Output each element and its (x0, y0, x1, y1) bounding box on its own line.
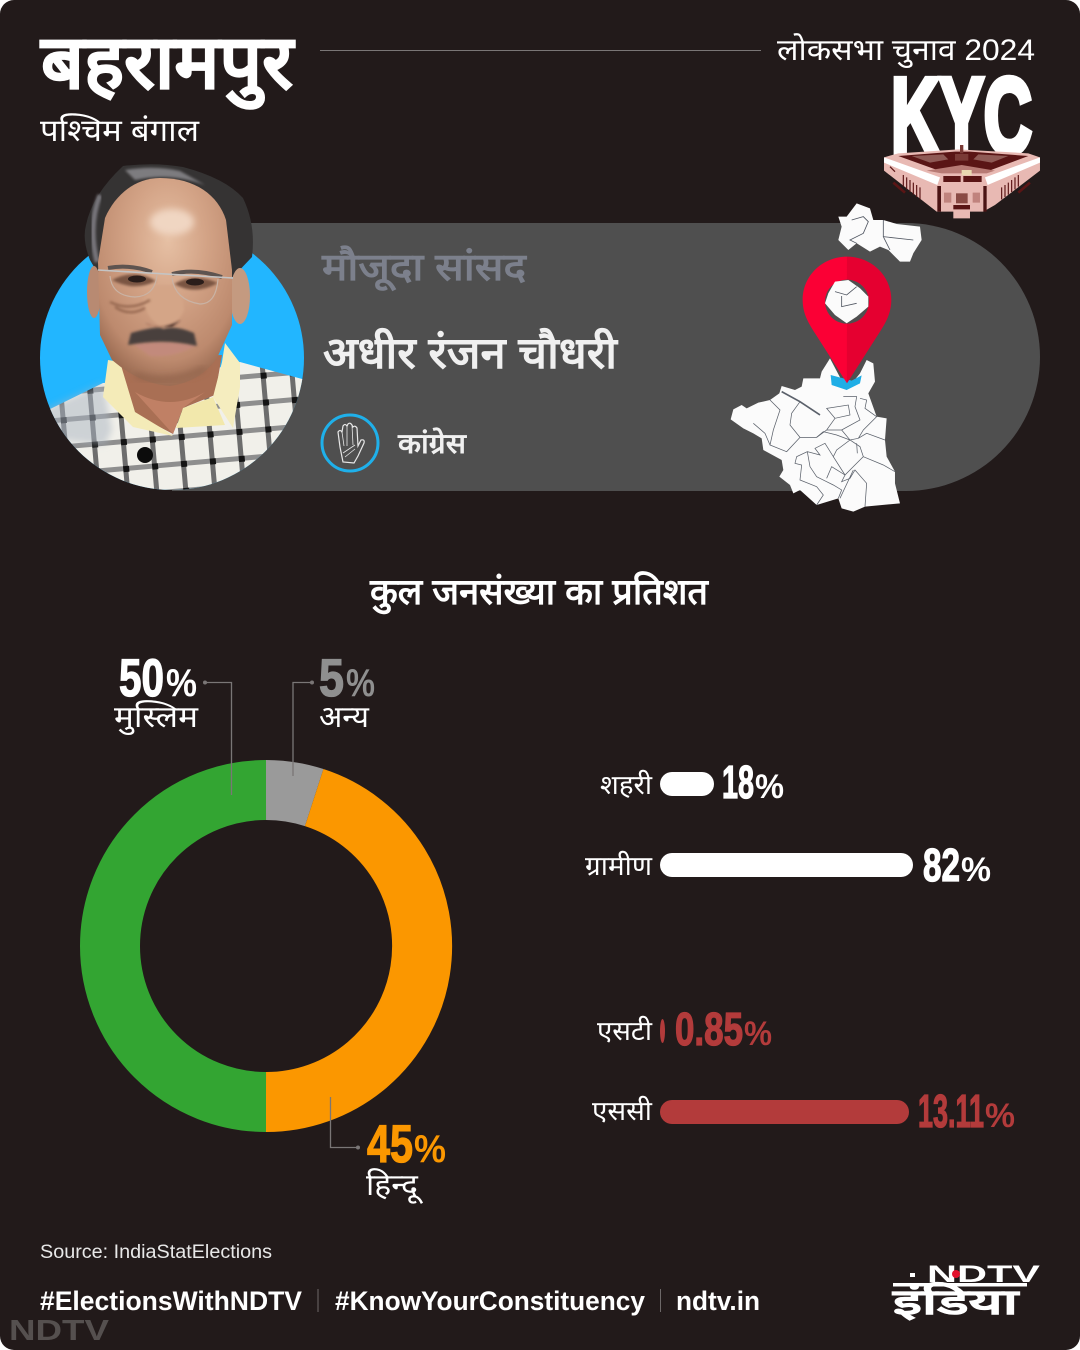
footer hashtags: ndtv.in (676, 1286, 760, 1316)
bar: SC: 13.11 (918, 1085, 984, 1137)
bar: rural: % (961, 851, 991, 889)
callout: other 5% (293, 649, 375, 776)
subtitle: state: पश्चिम बंगाल (40, 113, 200, 148)
KYC logo (884, 55, 1040, 218)
footer hashtags (40, 1286, 760, 1316)
icon: location pin (803, 257, 891, 383)
title: बहरामपुर (39, 20, 295, 110)
callout: muslim 50%: 50 (119, 649, 164, 708)
callout: other 5%: अन्य (319, 701, 370, 734)
bar: urban: शहरी (600, 769, 653, 800)
logo: NDTV watermark: NDTV (9, 1315, 110, 1347)
map: south districts (731, 358, 900, 512)
callout: muslim 50%: मुस्लिम (114, 700, 199, 736)
bar: SC (592, 1085, 1015, 1137)
chart heading: कुल जनसंख्या का प्रतिशत (369, 571, 709, 615)
bar: urban (600, 756, 784, 808)
bar: ST: एसटी (597, 1015, 653, 1046)
highlighted constituency (831, 375, 862, 390)
callout: hindu 45%: हिन्दू (366, 1168, 423, 1204)
portrait (38, 164, 306, 495)
footer hashtags: #ElectionsWithNDTV (40, 1286, 302, 1316)
footer hashtags: #KnowYourConstituency (335, 1286, 645, 1316)
bar: SC: एससी (592, 1095, 653, 1126)
callout: other 5%: % (346, 662, 375, 705)
callout: hindu 45% (330, 1097, 446, 1204)
panel: sitting MP (172, 223, 1040, 491)
callout: hindu 45%: % (414, 1128, 446, 1171)
party name: कांग्रेस (397, 427, 467, 459)
source: Source: IndiaStatElections (40, 1242, 272, 1263)
face (87, 266, 101, 318)
bar: rural (585, 839, 991, 891)
logo: NDTV India (891, 1261, 1040, 1322)
glasses and eyes (98, 267, 233, 304)
logo: NDTV India: NDTV (927, 1261, 1040, 1288)
bar: urban: % (755, 768, 784, 806)
icon: congress hand (322, 415, 378, 471)
bar: rural: ग्रामीण (585, 850, 652, 881)
logo: NDTV India: इंडिया (891, 1282, 1021, 1322)
callout: other 5%: 5 (319, 649, 344, 708)
callout: muslim 50%: % (166, 662, 197, 705)
bar: ST (597, 1003, 772, 1055)
MP name: अधीर रंजन चौधरी (323, 327, 619, 378)
callout: hindu 45%: 45 (367, 1115, 413, 1174)
hair (85, 164, 253, 277)
bar: urban: 18 (722, 756, 754, 808)
map: West Bengal (731, 203, 922, 512)
icon: parliament building (884, 145, 1040, 218)
label: sitting MP: मौजूदा सांसद (321, 245, 528, 292)
header label: election: लोकसभा चुनाव 2024 (777, 33, 1035, 69)
bar: ST: 0.85 (675, 1003, 743, 1055)
moustache and lips (128, 328, 197, 356)
bar: rural: 82 (923, 839, 960, 891)
donut chart (110, 790, 422, 1102)
bar: ST: % (744, 1015, 772, 1053)
bar: SC: % (985, 1097, 1015, 1135)
map: north districts (832, 203, 922, 262)
callout: muslim 50% (114, 649, 232, 795)
